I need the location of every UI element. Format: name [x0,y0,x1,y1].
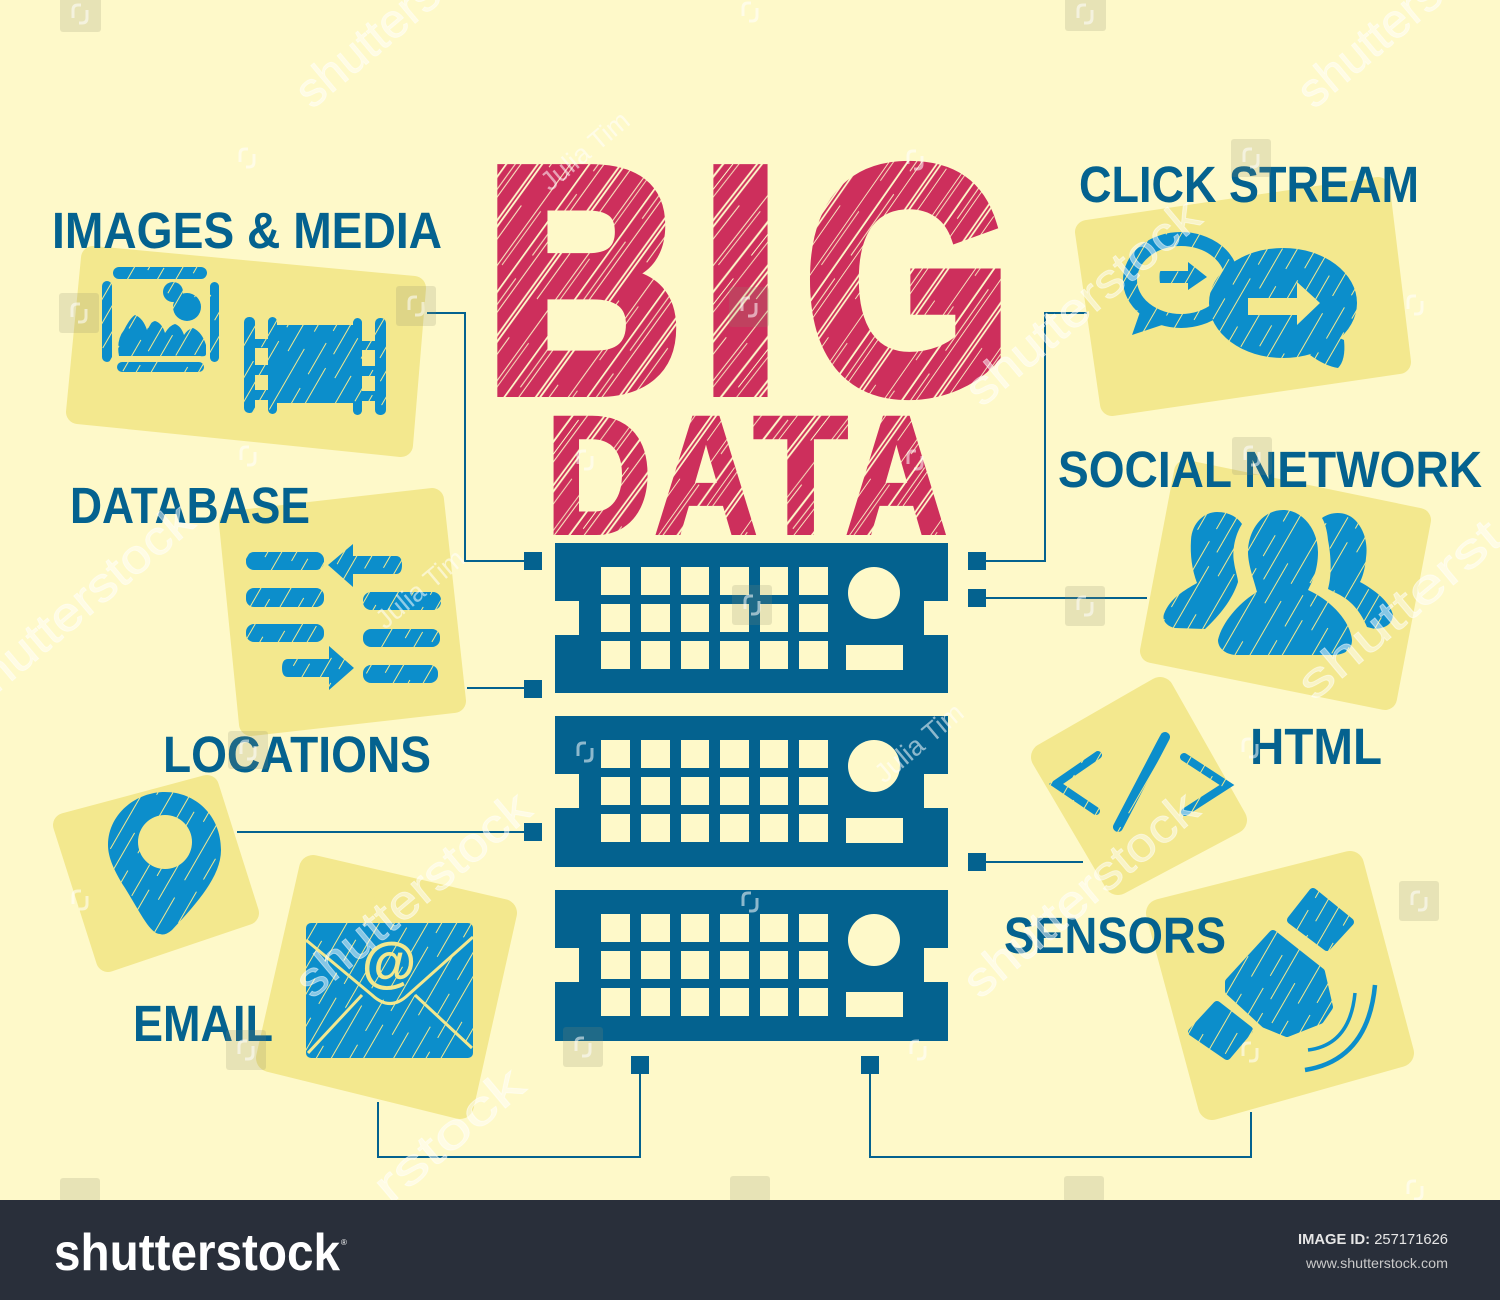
title: DATA [546,383,947,569]
label: click stream: CLICK STREAM [1079,156,1419,213]
icon: chat bubbles [1130,239,1357,368]
panel: images and media [78,258,414,445]
panel: database [231,500,454,724]
icon: html code brackets [1056,737,1227,827]
icon: email envelope [306,923,473,1058]
panel: social network [1152,472,1419,698]
panel: sensors [1160,865,1400,1106]
label: database: DATABASE [70,477,310,534]
icon: film strip [244,317,386,415]
watermark overlay: Julia Tim [370,543,470,635]
server unit 3 [555,890,948,1041]
watermark overlay: shutterstock [285,781,542,1008]
connector nodes [524,552,986,1074]
connector lines [237,313,1251,1157]
watermark overlay: shutterst [1287,509,1500,710]
footer registered mark: ® [341,1238,347,1247]
title: BIG: I [699,100,782,459]
panel: html [1045,691,1233,881]
title: DATA: A [655,383,757,568]
title: DATA: T [754,383,847,568]
server unit 2 [555,716,948,867]
icon: email envelope: @ [362,930,416,993]
watermark overlay: Julia Tim [535,105,635,197]
label: sensors: SENSORS [1004,907,1226,964]
label: locations: LOCATIONS [163,726,431,783]
panel: email [270,869,503,1105]
title: BIG: G [804,100,1012,459]
watermark overlay: Julia Tim [869,697,969,789]
panel: locations [65,787,247,960]
footer logo: shutterstock [54,1224,340,1282]
title: DATA: D [546,383,651,569]
watermark overlay: rstock [363,1056,536,1213]
icon: satellite sensor [1192,892,1375,1070]
footer image id: IMAGE ID: 257171626 [1298,1231,1448,1248]
footer website: www.shutterstock.com [1305,1255,1448,1271]
label: html: HTML [1250,718,1382,775]
server unit 1 [555,543,948,693]
panel: click stream [1087,189,1399,404]
icon: people group [1163,510,1393,655]
watermark overlay: shutterstock [955,189,1212,416]
icon: location pin [108,792,221,934]
label: email: EMAIL [133,995,273,1052]
watermark overlay: shutterstock [953,781,1210,1008]
title: BIG [484,100,1012,460]
title: BIG: B [484,102,684,460]
label: images and media: IMAGES & MEDIA [52,202,442,259]
title: DATA: A [846,383,947,568]
footer bar [0,1200,1500,1300]
icon: image picture [102,267,219,372]
icon: database transfer [246,544,441,690]
